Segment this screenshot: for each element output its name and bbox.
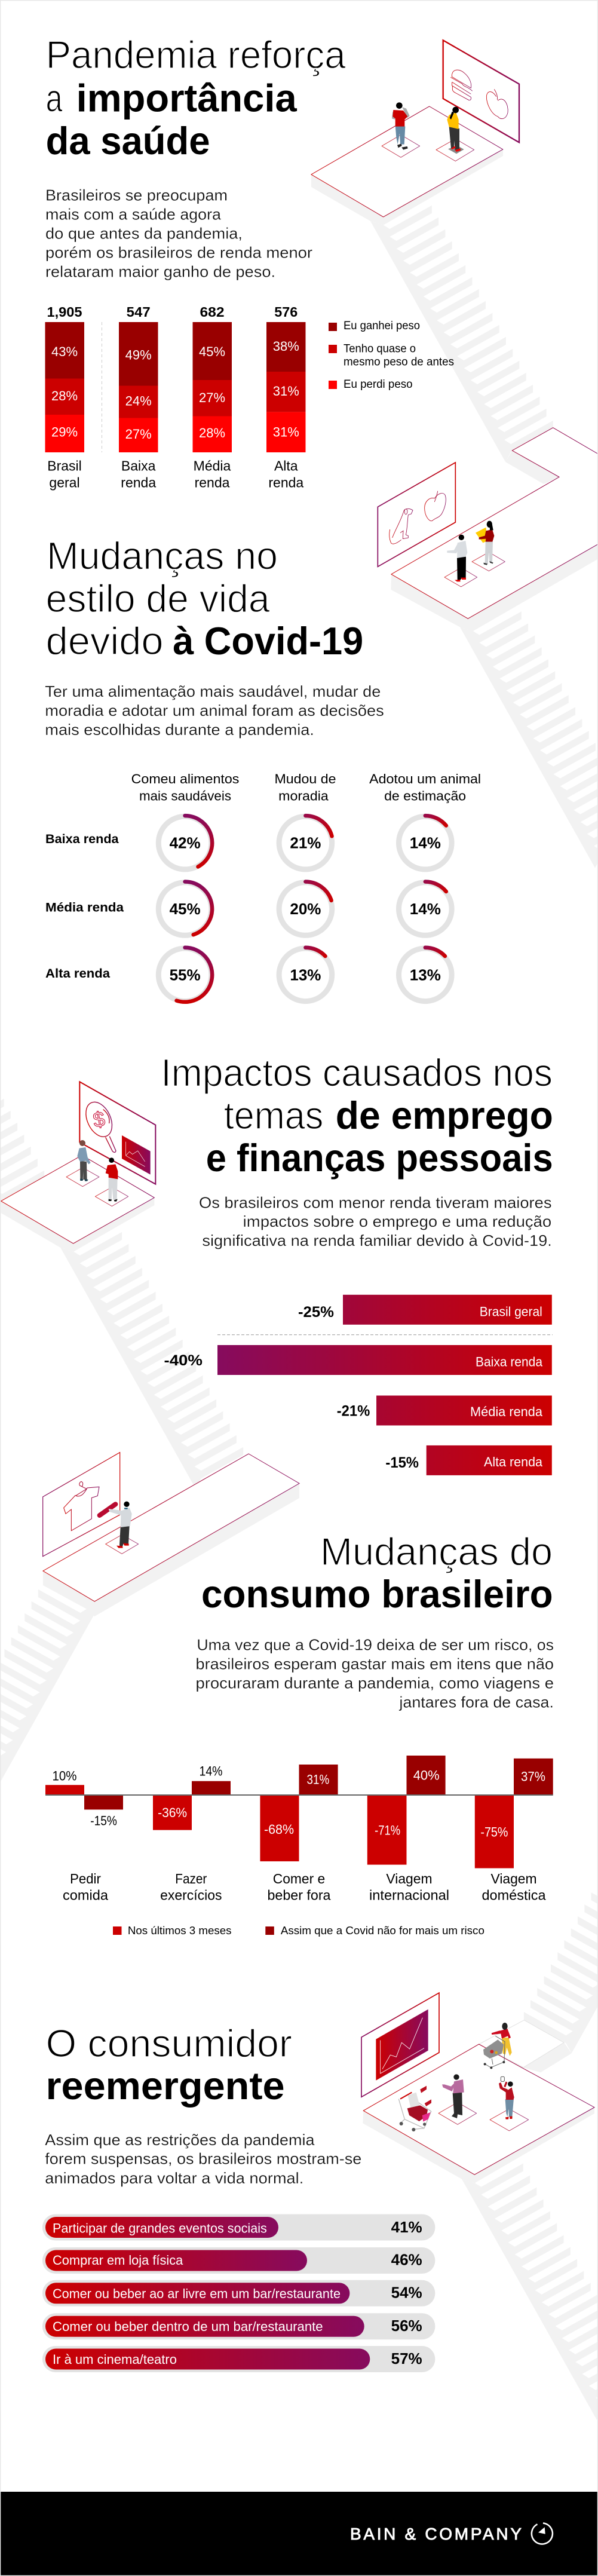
title: section 2: à Covid-19 bbox=[173, 619, 363, 663]
group: Pedir comida: 10% bbox=[53, 1769, 76, 1784]
pill: grandes eventos 41%: Participar de grandes eventos sociais bbox=[53, 2220, 267, 2236]
person in blue shirt bbox=[77, 1140, 91, 1181]
legend: weight change: Eu perdi peso bbox=[344, 378, 412, 391]
intro text: section 1: relataram maior ganho de peso. bbox=[45, 262, 275, 280]
floor markers bbox=[438, 2102, 529, 2131]
bar: Média renda: 27% bbox=[199, 390, 225, 405]
bar: Baixa renda: 49% bbox=[125, 348, 152, 363]
bar: Alta renda: 38% bbox=[273, 339, 299, 354]
person in yellow on a scale bbox=[447, 107, 464, 154]
diverging bar chart: consumption bbox=[45, 1756, 553, 1903]
illustration: shoppers on platform with rising chart bbox=[361, 1993, 594, 2174]
donut: media renda, moradia 20%: 20% bbox=[290, 900, 321, 918]
man in grey shirt bbox=[447, 535, 467, 581]
donut chart column headings bbox=[131, 771, 481, 803]
intro text: section 1: Brasileiros se preocupam bbox=[45, 186, 228, 204]
title: section 3: e finanças pessoais bbox=[206, 1136, 553, 1180]
title: section 5: O consumidor bbox=[46, 2021, 292, 2065]
bar: Baixa renda: 27% bbox=[125, 427, 152, 442]
group: Fazer exercícios bbox=[153, 1764, 231, 1903]
pill: dentro de bar 56%: 56% bbox=[391, 2317, 422, 2335]
bar: Média renda: renda bbox=[195, 474, 230, 490]
wall panel with magnifier and chart bbox=[79, 1082, 155, 1184]
donut: alta renda, animal 13%: 13% bbox=[410, 966, 441, 984]
group: Pedir comida: -15% bbox=[90, 1813, 117, 1828]
intro text: section 5: Assim que as restrições da pandemia bbox=[45, 2131, 315, 2149]
bar: Brasil geral: geral bbox=[49, 474, 80, 490]
wall panel with burger and apple bbox=[443, 40, 519, 142]
title: section 2: Mudanças no bbox=[47, 534, 278, 577]
intro text: section 3: impactos sobre o emprego e uma redução bbox=[243, 1212, 551, 1230]
donut: media renda, alimentos 45% bbox=[158, 882, 212, 935]
group: Comer e beber fora: Comer e bbox=[273, 1871, 325, 1886]
bar: Média renda -21%: Média renda bbox=[470, 1404, 543, 1419]
intro text: section 4: jantares fora de casa. bbox=[398, 1693, 554, 1711]
logo icon bbox=[532, 2523, 553, 2544]
pill: grandes eventos 41%: 41% bbox=[391, 2218, 422, 2236]
bar: Média renda: 682 bbox=[200, 304, 225, 320]
illustration: people looking at pet and apple panel bbox=[378, 428, 598, 618]
bar: Média renda: 45% bbox=[199, 344, 225, 359]
man in lab coat bbox=[109, 1502, 132, 1548]
bar: Média renda bbox=[192, 304, 232, 490]
bar: Alta renda: 31% bbox=[273, 424, 299, 440]
wall panel with magnifier and chart: $ bbox=[91, 1107, 107, 1132]
group: Pedir comida: comida bbox=[63, 1888, 108, 1903]
title: section 4: Mudanças do bbox=[320, 1530, 553, 1573]
group: Viagem internacional: 40% bbox=[413, 1768, 440, 1783]
group: Viagem internacional bbox=[367, 1756, 449, 1903]
intro text: section 4 bbox=[196, 1636, 554, 1711]
bar: Alta renda -15%: Alta renda bbox=[484, 1454, 543, 1469]
title: section 5 bbox=[46, 2021, 292, 2108]
legend: weight change bbox=[329, 320, 454, 391]
donut: alta renda, alimentos 55% bbox=[158, 948, 212, 1002]
red shopping cart with bags bbox=[398, 2086, 431, 2131]
logo wordmark: BAIN & COMPANY bbox=[350, 2525, 522, 2543]
bar: Baixa renda -40%: Baixa renda bbox=[476, 1355, 543, 1370]
donut chart column headings: mais saudáveis bbox=[139, 789, 231, 803]
group: Viagem doméstica: doméstica bbox=[482, 1888, 546, 1903]
donut: baixa renda, animal 14%: 14% bbox=[410, 834, 441, 852]
bar: Baixa renda -40%: -40% bbox=[164, 1352, 203, 1369]
donut: media renda, animal 14% bbox=[399, 882, 452, 935]
bar: Baixa renda: Baixa bbox=[121, 458, 156, 474]
person in red sweater bbox=[106, 1157, 118, 1202]
group: Viagem internacional: -71% bbox=[375, 1823, 400, 1838]
footer with logo bbox=[0, 2492, 598, 2576]
group: Comer e beber fora bbox=[260, 1765, 338, 1903]
donut chart column headings: Comeu alimentos bbox=[131, 771, 239, 786]
intro text: section 2: mais escolhidas durante a pandemia. bbox=[45, 721, 314, 739]
donut: media renda, moradia 20% bbox=[279, 882, 332, 935]
donut: baixa renda, moradia 21%: 21% bbox=[290, 834, 321, 852]
group: Viagem internacional: Viagem bbox=[386, 1871, 433, 1886]
bar: Alta renda: Alta bbox=[274, 458, 298, 474]
intro text: section 3: Os brasileiros com menor renda tiveram maiores bbox=[199, 1193, 552, 1211]
illustration: man at clothing panel bbox=[43, 1453, 299, 1601]
bar: Baixa renda: 24% bbox=[125, 393, 152, 408]
pill: dentro de bar 56%: Comer ou beber dentro de um bar/restaurante bbox=[53, 2319, 323, 2334]
floor markers bbox=[382, 135, 474, 161]
intro text: section 4: procuraram durante a pandemia, como viagens e bbox=[196, 1674, 554, 1692]
wall panel with t-shirt and tag bbox=[43, 1453, 120, 1557]
title: section 4: consumo brasileiro bbox=[201, 1572, 553, 1616]
legend: consumption: Nos últimos 3 meses bbox=[128, 1924, 232, 1937]
bar: Alta renda: renda bbox=[268, 474, 303, 490]
title: section 3: de emprego bbox=[336, 1094, 553, 1137]
donut chart column headings: Mudou de bbox=[275, 771, 336, 786]
legend: consumption bbox=[113, 1924, 484, 1937]
group: Comer e beber fora: beber fora bbox=[268, 1888, 331, 1903]
bar: Alta renda: 31% bbox=[273, 384, 299, 399]
bar: Baixa renda -40% bbox=[164, 1345, 552, 1375]
donut: media renda, alimentos 45%: 45% bbox=[170, 900, 201, 918]
title: section 1: a bbox=[46, 76, 63, 120]
group: Viagem internacional: internacional bbox=[369, 1888, 449, 1903]
pill: grandes eventos 41% bbox=[42, 2214, 435, 2241]
pill: cinema 57% bbox=[42, 2346, 435, 2372]
bar: Brasil geral bbox=[45, 304, 84, 490]
group: Viagem doméstica bbox=[475, 1759, 553, 1903]
illustration: people looking at food panel on a platform bbox=[311, 40, 519, 217]
bar: Alta renda: 576 bbox=[274, 304, 298, 320]
bar: Alta renda -15% bbox=[385, 1445, 552, 1475]
group: Fazer exercícios: exercícios bbox=[160, 1888, 222, 1903]
wall panel with growth chart bbox=[361, 1993, 439, 2097]
donut grid: lifestyle changes by income bbox=[158, 816, 452, 1002]
pill: cinema 57%: Ir à um cinema/teatro bbox=[53, 2352, 177, 2367]
title: section 3 bbox=[161, 1050, 553, 1180]
donut: baixa renda, moradia 21% bbox=[279, 816, 332, 869]
woman pushing grey cart bbox=[483, 2023, 512, 2069]
title: section 4 bbox=[201, 1530, 553, 1616]
pill: ao ar livre 54% bbox=[42, 2280, 435, 2307]
group: Comer e beber fora: -68% bbox=[264, 1822, 294, 1837]
intro text: section 1: do que antes da pandemia, bbox=[45, 225, 243, 243]
donut chart column headings: moradia bbox=[278, 789, 329, 803]
illustration: people looking at finance panel bbox=[1, 1082, 155, 1243]
donut: baixa renda, alimentos 42%: 42% bbox=[170, 834, 201, 852]
person with yellow folder bbox=[476, 521, 494, 565]
group: Viagem doméstica: Viagem bbox=[491, 1871, 536, 1886]
donut: alta renda, alimentos 55%: 55% bbox=[170, 966, 201, 984]
bar: Baixa renda bbox=[119, 304, 158, 490]
title: section 3: temas bbox=[224, 1094, 323, 1137]
stacked bar chart: weight change by income bbox=[45, 304, 306, 490]
woman taking a photo bbox=[499, 2076, 514, 2119]
donut: alta renda, moradia 13%: 13% bbox=[290, 966, 321, 984]
intro text: section 1 bbox=[45, 186, 312, 280]
bar: Brasil geral -25% bbox=[298, 1295, 552, 1325]
pill: loja física 46%: 46% bbox=[391, 2251, 422, 2269]
floor markers bbox=[444, 552, 505, 587]
intro text: section 2: Ter uma alimentação mais saudável, mudar de bbox=[45, 682, 381, 700]
bar: Brasil geral -25%: Brasil geral bbox=[480, 1304, 542, 1319]
donut: alta renda, animal 13% bbox=[399, 948, 452, 1001]
group: Pedir comida: Pedir bbox=[70, 1871, 101, 1886]
group: Viagem doméstica: 37% bbox=[521, 1769, 545, 1784]
group: Pedir comida bbox=[45, 1769, 123, 1903]
donut: alta renda, moradia 13% bbox=[279, 948, 332, 1001]
group: Fazer exercícios: 14% bbox=[200, 1764, 222, 1778]
intro text: section 3 bbox=[199, 1193, 552, 1249]
bar: Média renda -21%: -21% bbox=[337, 1402, 370, 1419]
donut chart row labels: Alta renda bbox=[45, 966, 111, 981]
pill: loja física 46% bbox=[42, 2247, 435, 2274]
pill: dentro de bar 56% bbox=[42, 2313, 435, 2339]
bar: Baixa renda: 547 bbox=[127, 304, 151, 320]
person in red shirt bbox=[392, 102, 410, 150]
intro text: section 5: animados para voltar a vida normal. bbox=[45, 2169, 303, 2187]
bar: Alta renda -15%: -15% bbox=[385, 1454, 419, 1471]
donut chart column headings: Adotou um animal bbox=[369, 771, 481, 786]
pill: cinema 57%: 57% bbox=[391, 2350, 422, 2367]
horizontal bar chart: income reduction bbox=[164, 1295, 553, 1475]
bar: Brasil geral: 29% bbox=[51, 424, 78, 440]
legend: weight change: mesmo peso de antes bbox=[344, 356, 454, 368]
group: Comer e beber fora: 31% bbox=[307, 1772, 329, 1787]
intro text: section 3: significativa na renda familiar devido à Covid-19. bbox=[202, 1232, 552, 1249]
title: section 1 bbox=[46, 33, 346, 163]
title: section 3: Impactos causados nos bbox=[161, 1050, 553, 1094]
man in purple shirt bbox=[442, 2074, 464, 2118]
title: section 5: reemergente bbox=[46, 2064, 285, 2108]
intro text: section 2: moradia e adotar um animal foram as decisões bbox=[45, 702, 384, 719]
intro text: section 4: Uma vez que a Covid-19 deixa de ser um risco, os bbox=[197, 1636, 554, 1654]
donut chart column headings: de estimação bbox=[384, 789, 466, 803]
group: Fazer exercícios: -36% bbox=[158, 1805, 187, 1820]
pill: ao ar livre 54%: Comer ou beber ao ar livre em um bar/restaurante bbox=[53, 2286, 341, 2301]
legend: weight change: Tenho quase o bbox=[344, 343, 416, 356]
intro text: section 1: mais com a saúde agora bbox=[45, 206, 222, 223]
title: section 2: estilo de vida bbox=[46, 577, 270, 620]
bar: Média renda -21% bbox=[337, 1396, 552, 1426]
bar: Brasil geral -25%: -25% bbox=[298, 1304, 334, 1321]
donut: media renda, animal 14%: 14% bbox=[410, 900, 441, 918]
bar: Alta renda bbox=[266, 304, 306, 490]
title: section 1: da saúde bbox=[46, 119, 210, 163]
title: section 2 bbox=[46, 534, 363, 663]
group: Viagem doméstica: -75% bbox=[480, 1824, 508, 1839]
intro text: section 5: forem suspensas, os brasileiros mostram-se bbox=[45, 2150, 361, 2168]
pill: ao ar livre 54%: 54% bbox=[391, 2284, 422, 2302]
floor marker bbox=[106, 1534, 139, 1554]
legend: consumption: Assim que a Covid não for mais um risco bbox=[281, 1924, 484, 1937]
intro text: section 2 bbox=[45, 682, 384, 739]
bar: Baixa renda: renda bbox=[121, 474, 156, 490]
bar: Brasil geral: 1,905 bbox=[47, 304, 82, 320]
intro text: section 1: porém os brasileiros de renda menor bbox=[45, 244, 312, 262]
group: Fazer exercícios: Fazer bbox=[175, 1871, 207, 1886]
donut: baixa renda, animal 14% bbox=[399, 816, 452, 869]
pill: loja física 46%: Comprar em loja física bbox=[53, 2253, 183, 2268]
wall panel with dog and apple bbox=[378, 462, 455, 566]
donut chart row labels bbox=[45, 832, 124, 981]
donut: baixa renda, alimentos 42% bbox=[158, 816, 212, 869]
bar: Brasil geral: 43% bbox=[51, 344, 78, 359]
bar: Brasil geral: Brasil bbox=[47, 458, 82, 474]
title: section 1: importância bbox=[76, 76, 298, 120]
bar: Média renda: Média bbox=[194, 458, 231, 474]
pill bar chart: activities people want to resume bbox=[42, 2214, 435, 2372]
donut chart row labels: Baixa renda bbox=[45, 832, 119, 846]
bar: Média renda: 28% bbox=[199, 425, 225, 440]
title: section 2: devido bbox=[46, 619, 164, 663]
bar: Brasil geral: 28% bbox=[51, 388, 78, 403]
title: section 1: Pandemia reforça bbox=[46, 33, 346, 76]
floor markers bbox=[66, 1168, 128, 1206]
legend: weight change: Eu ganhei peso bbox=[344, 320, 420, 332]
intro text: section 4: brasileiros esperam gastar mais em itens que não bbox=[196, 1655, 554, 1673]
intro text: section 5 bbox=[45, 2131, 361, 2187]
donut chart row labels: Média renda bbox=[45, 900, 124, 915]
